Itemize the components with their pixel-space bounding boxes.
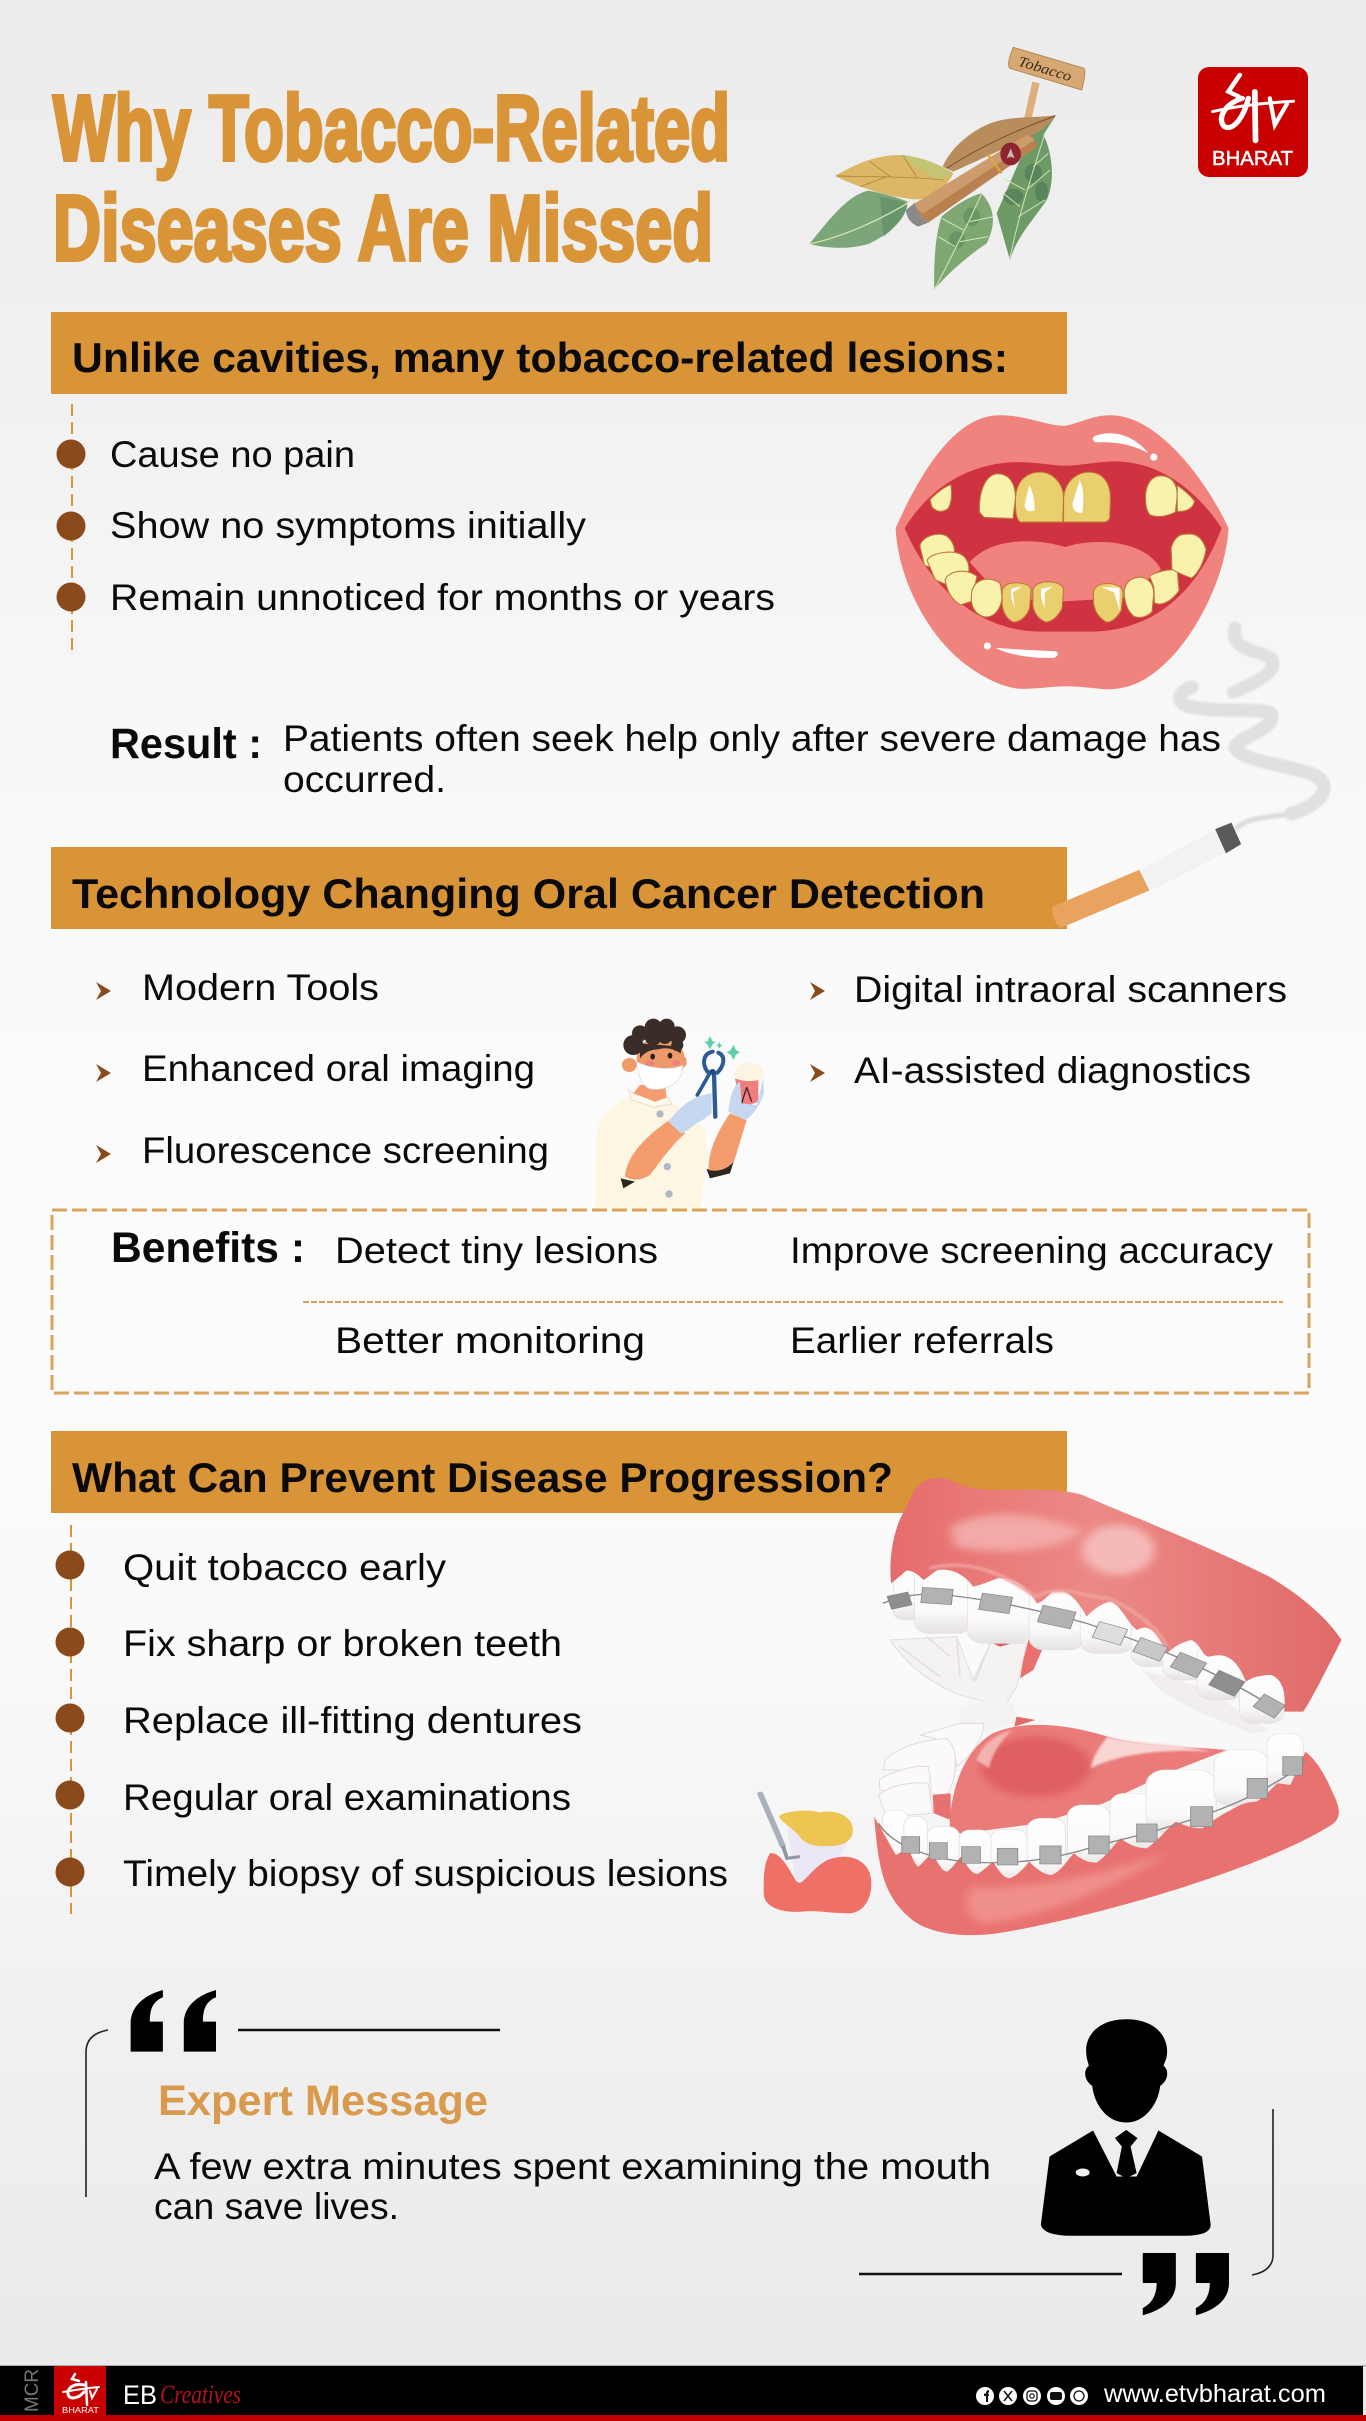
- list: prevention steps: Replace ill-fitting dentures: [123, 1700, 582, 1741]
- list: modern tools: Enhanced oral imaging: [142, 1048, 535, 1089]
- panel: expert message: [86, 1990, 1273, 2315]
- icon: denture model with braces: [874, 1478, 1341, 1935]
- icon: mouth with yellow teeth: [896, 415, 1229, 689]
- list: prevention steps: Quit tobacco early: [123, 1547, 447, 1588]
- panel: benefits: Improve screening accuracy: [790, 1230, 1274, 1271]
- footer: MCR: [22, 2369, 43, 2412]
- heading: technology: Technology Changing Oral Cancer Detection: [72, 870, 985, 917]
- panel: technology: [51, 847, 1309, 1393]
- heading: prevention: [51, 1431, 1067, 1513]
- quote frame: closing: [859, 2109, 1273, 2315]
- title: [53, 76, 730, 280]
- icon: cigarette with smoke: [1052, 628, 1324, 928]
- heading: technology: [51, 847, 1067, 929]
- panel: benefits: Better monitoring: [335, 1320, 645, 1361]
- heading: unlike cavities: [51, 312, 1067, 394]
- panel: benefits: Earlier referrals: [790, 1320, 1054, 1361]
- footer: EB: [123, 2380, 157, 2410]
- list: prevention steps: Fix sharp or broken teeth: [123, 1623, 562, 1664]
- quote text: can save lives.: [154, 2186, 399, 2227]
- panel: benefits: Detect tiny lesions: [335, 1230, 658, 1271]
- panel: benefits: [52, 1210, 1309, 1393]
- footer: [0, 2365, 1366, 2421]
- list: lesion traits: Cause no pain: [110, 434, 355, 475]
- list: prevention steps: [56, 1547, 728, 1894]
- icon: tobacco leaves and cigar: [809, 47, 1085, 289]
- icons: social media: [976, 2387, 1088, 2405]
- result text: Result :: [110, 720, 262, 768]
- panel: lesions: [51, 312, 1221, 800]
- list: lesion traits: [56, 434, 775, 618]
- list: prevention steps: Regular oral examinations: [123, 1777, 571, 1818]
- result text: occurred.: [283, 759, 446, 800]
- quote text: A few extra minutes spent examining the mouth: [154, 2146, 991, 2187]
- result text: [110, 718, 1221, 800]
- icon: dentist holding forceps and tooth: [595, 1019, 764, 1209]
- quote text: [154, 2146, 991, 2227]
- footer: Creatives: [160, 2380, 241, 2409]
- list: modern tools: Digital intraoral scanners: [854, 969, 1287, 1010]
- result text: Patients often seek help only after severe damage has: [283, 718, 1221, 759]
- list: modern tools: Modern Tools: [142, 967, 379, 1008]
- heading: unlike cavities: Unlike cavities, many tobacco-related lesions:: [72, 334, 1008, 381]
- heading: prevention: What Can Prevent Disease Progression?: [72, 1454, 893, 1501]
- logo: footer ETV Bharat: BHARAT: [62, 2405, 99, 2415]
- heading: expert message: Expert Message: [158, 2077, 488, 2125]
- title: Why Tobacco-Related: [53, 76, 730, 180]
- logo: ETV Bharat: [1198, 67, 1308, 177]
- panel: benefits: Benefits :: [111, 1224, 305, 1272]
- list: lesion traits: Remain unnoticed for months or years: [110, 577, 775, 618]
- icon: tobacco leaves and cigar: Tobacco: [1016, 54, 1073, 85]
- list: modern tools: [96, 967, 1287, 1171]
- icon: expert silhouette: [1041, 2019, 1211, 2236]
- list: modern tools: Fluorescence screening: [142, 1130, 549, 1171]
- lower arch back teeth: [878, 1723, 983, 1817]
- list: modern tools: AI-assisted diagnostics: [854, 1050, 1251, 1091]
- panel: prevention: [51, 1431, 1067, 1914]
- footer: www.etvbharat.com: [1103, 2380, 1326, 2408]
- title: Diseases Are Missed: [53, 176, 713, 280]
- quote frame: opening: [86, 1990, 500, 2197]
- list: lesion traits: Show no symptoms initially: [110, 505, 587, 546]
- logo: ETV Bharat: BHARAT: [1212, 148, 1293, 170]
- icon: tooth with tartar and scaler: [760, 1794, 871, 1913]
- list: prevention steps: Timely biopsy of suspicious lesions: [123, 1853, 728, 1894]
- logo: footer ETV Bharat: [54, 2366, 106, 2415]
